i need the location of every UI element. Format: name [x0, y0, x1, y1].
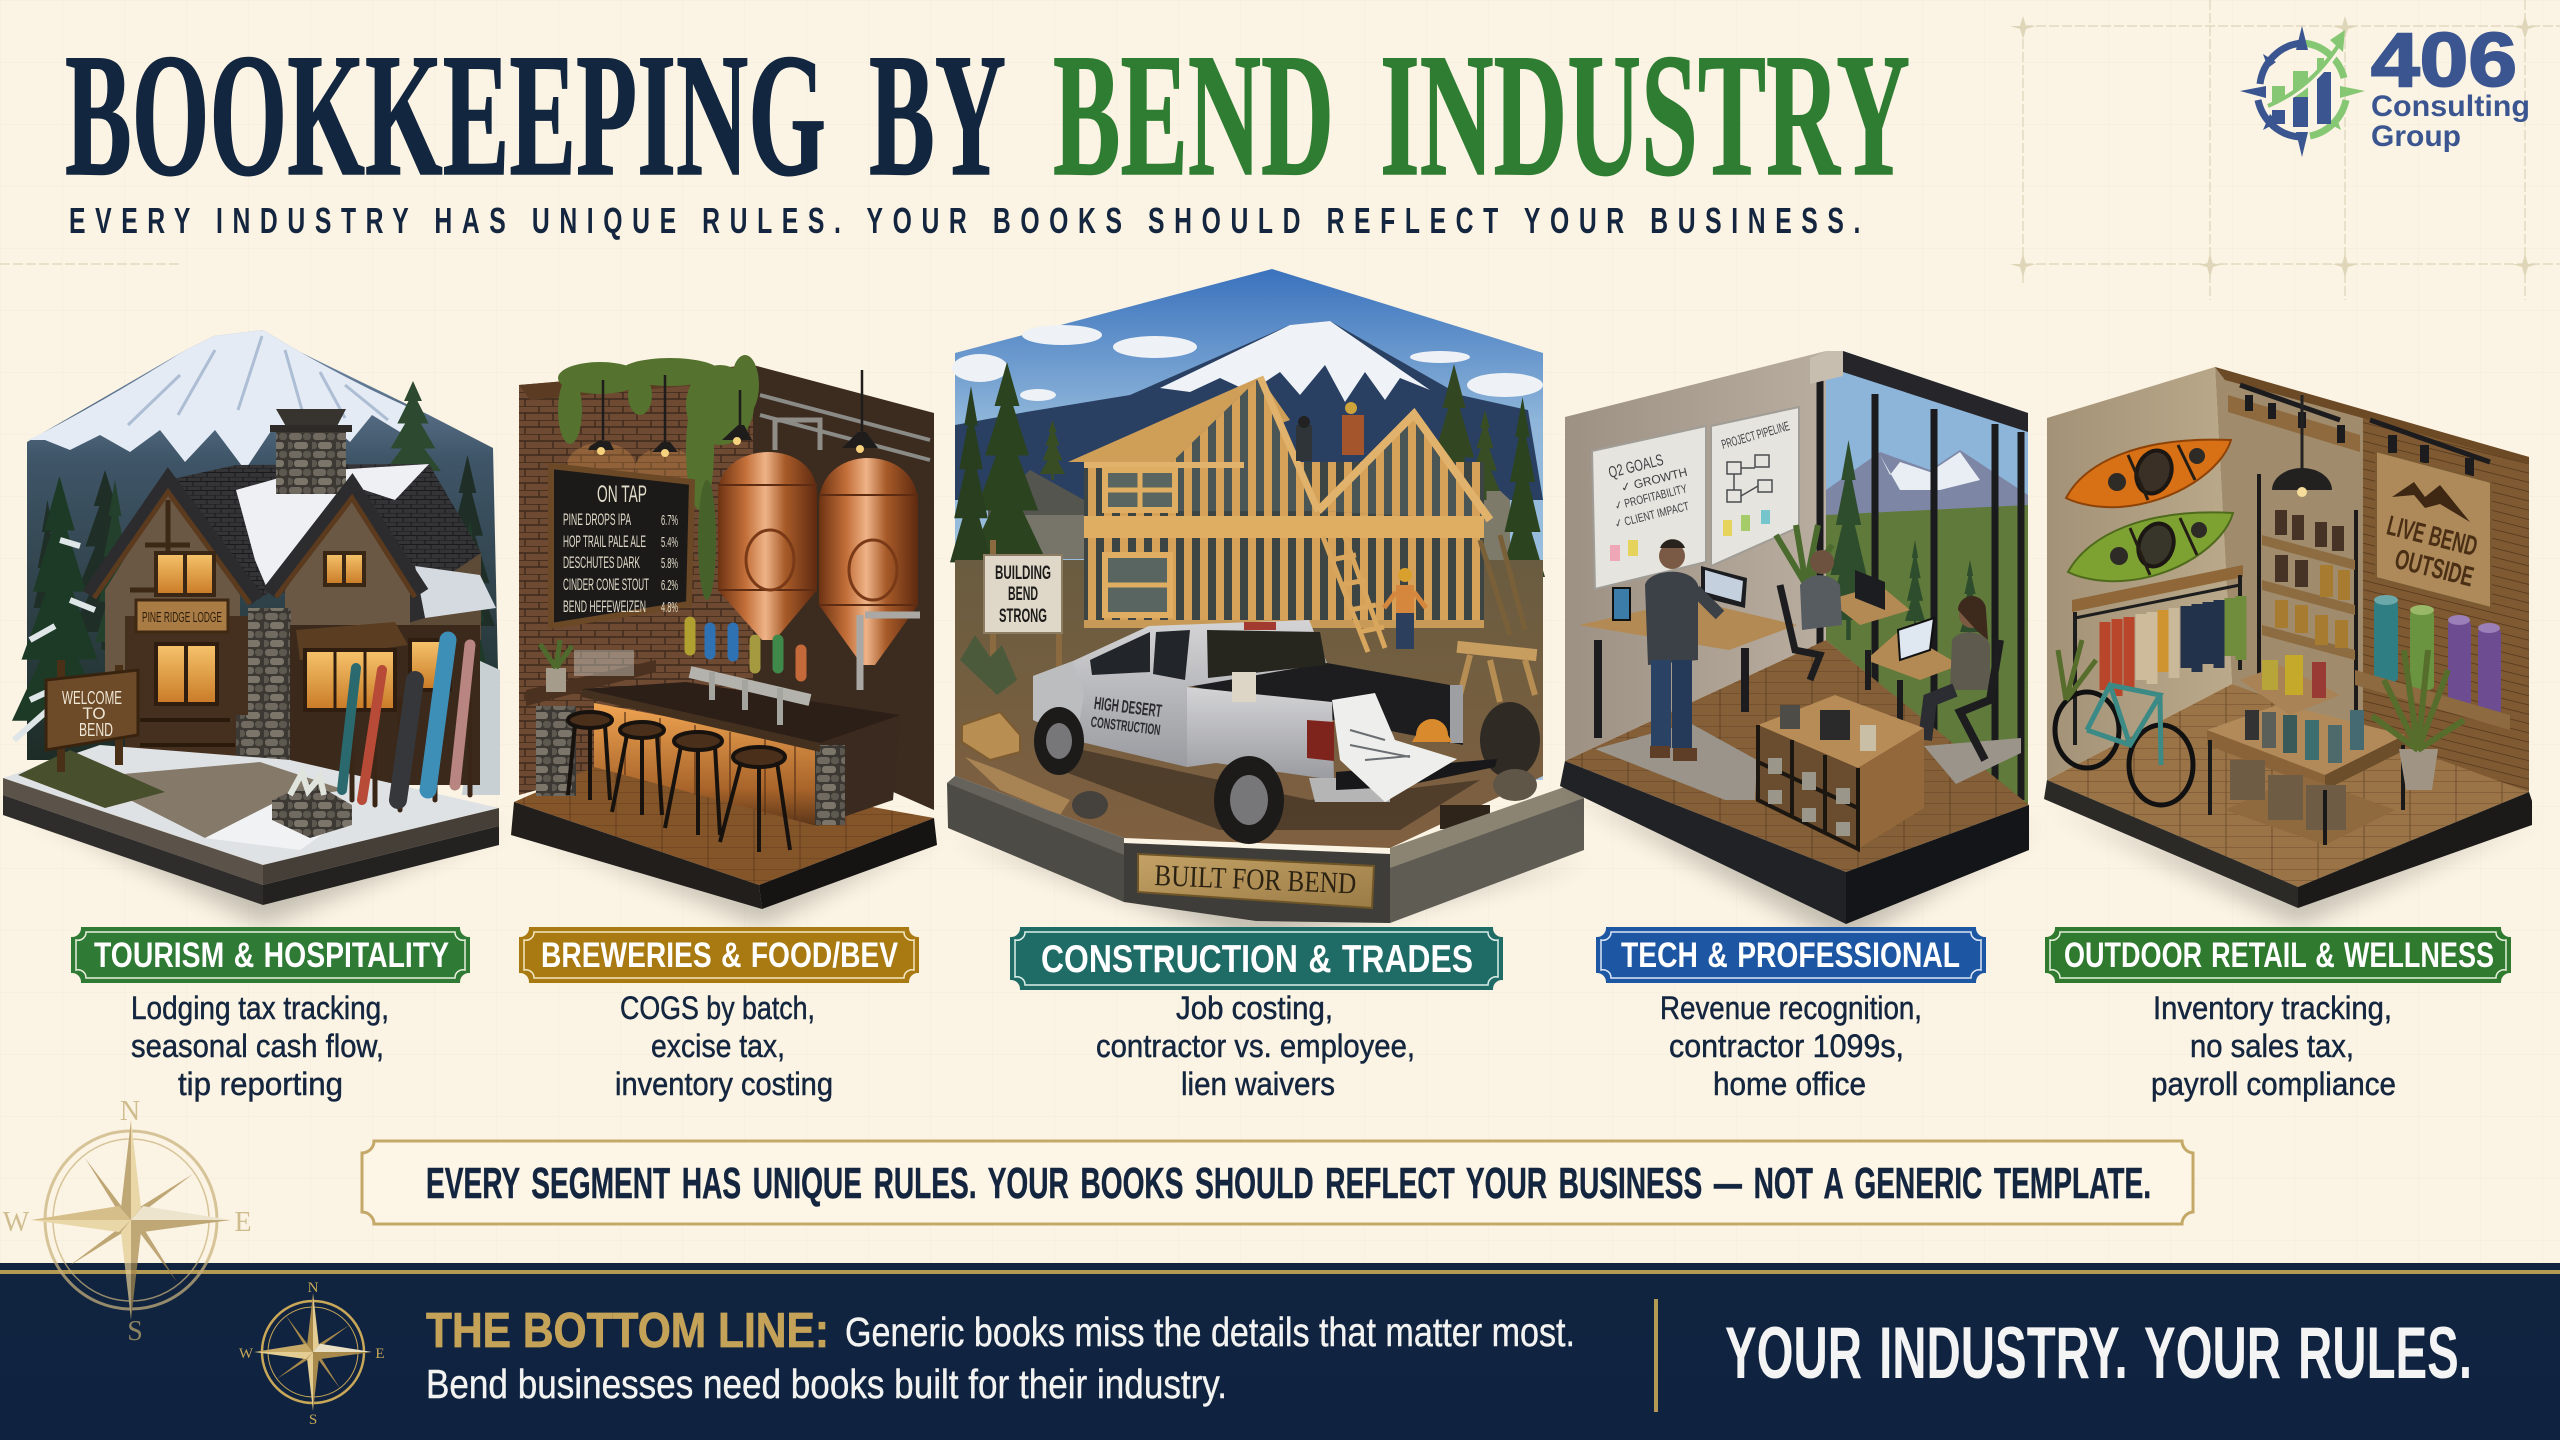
pendant lamp	[2272, 395, 2332, 497]
shelf with glassware	[526, 640, 656, 796]
chalkboard menu: 4.8%	[661, 599, 678, 616]
live bend outside sign	[2376, 451, 2491, 608]
storage shelf unit	[1758, 695, 1924, 849]
text: breweries details	[615, 990, 833, 1102]
whiteboards: ✓ PROFITABILITY	[1613, 481, 1689, 513]
stone plinth with plaque: BUILT FOR BEND	[1154, 859, 1357, 900]
panel: construction and trades diorama	[947, 269, 1590, 945]
chalkboard menu: 6.7%	[661, 512, 678, 529]
shop walls	[2047, 367, 2529, 792]
text: tech details	[1660, 990, 1922, 1102]
building bend strong sign: BEND	[1008, 584, 1038, 605]
skis and snowboards	[342, 640, 470, 810]
text: breweries details: inventory costing	[615, 1066, 833, 1102]
chalkboard menu: HOP TRAIL PALE ALE	[563, 532, 646, 551]
title: BY	[869, 18, 1006, 213]
bicycle	[2055, 685, 2193, 805]
icon: large faded compass rose: E	[234, 1207, 252, 1238]
text: breweries details: excise tax,	[651, 1028, 785, 1064]
floor and plinth	[1560, 640, 2029, 924]
title: BOOKKEEPING	[65, 18, 826, 213]
display table with bottles	[2207, 655, 2405, 845]
divider	[1654, 1299, 1658, 1412]
icon: large faded compass rose: S	[127, 1316, 143, 1347]
chalkboard menu: ON TAP	[597, 481, 647, 508]
lumber and sawhorse	[960, 635, 1540, 829]
chalkboard menu: BEND HEFEWEIZEN	[563, 597, 646, 616]
brick walls	[519, 365, 934, 810]
label: breweries and food/bev	[520, 928, 918, 982]
chalkboard menu: 5.8%	[661, 555, 678, 572]
welcome to bend sign: TO	[82, 704, 106, 723]
title: BEND	[1053, 18, 1334, 213]
whiteboards: PROJECT PIPELINE	[1720, 418, 1791, 452]
background trees and houses	[950, 362, 1545, 597]
whiteboards	[1592, 407, 1799, 589]
stone plinth with plaque	[947, 776, 1584, 923]
title: INDUSTRY	[1380, 18, 1910, 213]
logo wordmark: Group	[2371, 120, 2461, 153]
label: construction and trades: CONSTRUCTION & TRADES	[1041, 938, 1473, 981]
whiteboards: ✓ CLIENT IMPACT	[1613, 499, 1691, 531]
potted plant	[2058, 640, 2464, 790]
bar counter and taps	[582, 622, 900, 826]
callout: every segment has unique rules	[362, 1141, 2193, 1224]
whiteboards: Q2 GOALS	[1607, 452, 1665, 482]
panel: tourism and hospitality diorama	[3, 330, 510, 925]
clothing rack	[2072, 565, 2243, 745]
mountain backdrop	[27, 330, 500, 760]
timber frame house	[1068, 377, 1525, 652]
label: construction and trades	[1011, 928, 1502, 989]
yoga mats	[2355, 595, 2510, 730]
text: outdoor retail details: Inventory tracking,	[2153, 990, 2392, 1026]
office workers	[1645, 539, 2000, 761]
text: the bottom line	[426, 1304, 1575, 1407]
desks and monitors	[1579, 566, 1960, 738]
label: outdoor retail and wellness	[2046, 928, 2510, 982]
text: tourism details: seasonal cash flow,	[131, 1028, 384, 1064]
text: the bottom line: Generic books miss the details that matter most.	[845, 1309, 1575, 1355]
boot shelves	[2259, 474, 2356, 720]
logo wordmark	[2371, 18, 2530, 153]
icon: large faded compass rose: N	[120, 1096, 140, 1127]
floor and plinth	[511, 760, 937, 909]
icon: small gold compass rose	[239, 1280, 385, 1428]
text: tourism details: tip reporting	[178, 1066, 343, 1102]
text: tech details: Revenue recognition,	[1660, 990, 1922, 1026]
label: tech and professional	[1597, 928, 1985, 982]
whiteboards: ✓ GROWTH	[1619, 465, 1689, 495]
text: the bottom line: Bend businesses need books built for their industry.	[426, 1361, 1227, 1407]
office walls	[1565, 351, 2028, 805]
panel: outdoor retail and wellness diorama	[2044, 367, 2540, 925]
pendant lamps	[588, 370, 878, 457]
stone planter	[272, 773, 352, 838]
bottom band	[0, 1263, 2560, 1440]
logo: 406 Consulting Group	[2240, 18, 2530, 157]
lodge name sign: PINE RIDGE LODGE	[142, 609, 222, 626]
panel: breweries and food diorama	[511, 355, 945, 925]
live bend outside sign: OUTSIDE	[2392, 543, 2477, 592]
sky and mountain	[952, 269, 1543, 780]
icon: small gold compass rose: E	[375, 1346, 385, 1362]
pickup truck	[1033, 620, 1497, 844]
text: tech details: home office	[1713, 1066, 1866, 1102]
welcome to bend sign: WELCOME	[62, 688, 122, 708]
building bend strong sign: BUILDING	[995, 563, 1051, 584]
kayaks	[2066, 440, 2233, 581]
text: tourism details: Lodging tax tracking,	[131, 990, 389, 1026]
live bend outside sign: LIVE BEND	[2384, 510, 2481, 562]
text: construction details: lien waivers	[1181, 1066, 1335, 1102]
chalkboard menu	[551, 466, 692, 626]
icon: large faded compass rose: W	[3, 1207, 30, 1238]
lodge name sign	[136, 600, 228, 632]
icon: small gold compass rose: W	[239, 1346, 254, 1362]
welcome to bend sign: BEND	[79, 720, 113, 740]
workers	[1296, 402, 1426, 649]
text: construction details: Job costing,	[1176, 990, 1333, 1026]
truck door lettering: CONSTRUCTION	[1090, 714, 1161, 739]
icon: compass chart mark	[2240, 26, 2365, 157]
ground	[955, 560, 1543, 848]
building bend strong sign	[984, 540, 1062, 690]
chalkboard menu: CINDER CONE STOUT	[563, 575, 649, 594]
text: construction details: contractor vs. employee,	[1096, 1028, 1415, 1064]
chalkboard menu: 6.2%	[661, 577, 678, 594]
label: tech and professional: TECH & PROFESSIONAL	[1621, 936, 1960, 975]
icon: large faded compass rose	[3, 1096, 252, 1347]
label: tourism and hospitality	[72, 928, 469, 982]
icon: small gold compass rose: N	[308, 1280, 319, 1296]
logo wordmark: 406	[2371, 18, 2517, 103]
floor and plinth	[2044, 684, 2532, 908]
text: breweries details: COGS by batch,	[620, 990, 815, 1026]
truck door lettering	[1090, 693, 1164, 739]
text: outdoor retail details	[2151, 990, 2396, 1102]
text: tourism details	[131, 990, 389, 1102]
logo wordmark: Consulting	[2371, 90, 2530, 123]
bar stools	[568, 712, 790, 852]
panel: tech and professional diorama	[1560, 351, 2040, 945]
chalkboard menu: 5.4%	[661, 534, 678, 551]
ground and plinth	[3, 745, 499, 905]
text: the bottom line: THE BOTTOM LINE:	[426, 1304, 829, 1358]
icon: small gold compass rose: S	[309, 1412, 317, 1428]
plant	[1776, 525, 1832, 585]
text: outdoor retail details: no sales tax,	[2190, 1028, 2354, 1064]
text: tech details: contractor 1099s,	[1669, 1028, 1904, 1064]
label: tourism and hospitality: TOURISM & HOSPITALITY	[94, 936, 449, 975]
text: outdoor retail details: payroll compliance	[2151, 1066, 2396, 1102]
welcome to bend sign	[46, 660, 138, 772]
building bend strong sign: STRONG	[999, 606, 1047, 627]
truck door lettering: HIGH DESERT	[1093, 693, 1163, 721]
evergreen trees	[12, 381, 500, 795]
chalkboard menu: DESCHUTES DARK	[563, 553, 640, 572]
hop vines	[558, 355, 759, 600]
text: construction details	[1096, 990, 1415, 1102]
copper tanks	[718, 420, 920, 690]
lodge building	[89, 409, 496, 785]
chalkboard menu: PINE DROPS IPA	[563, 510, 631, 529]
label: breweries and food/bev: BREWERIES & FOOD/BEV	[541, 936, 899, 975]
